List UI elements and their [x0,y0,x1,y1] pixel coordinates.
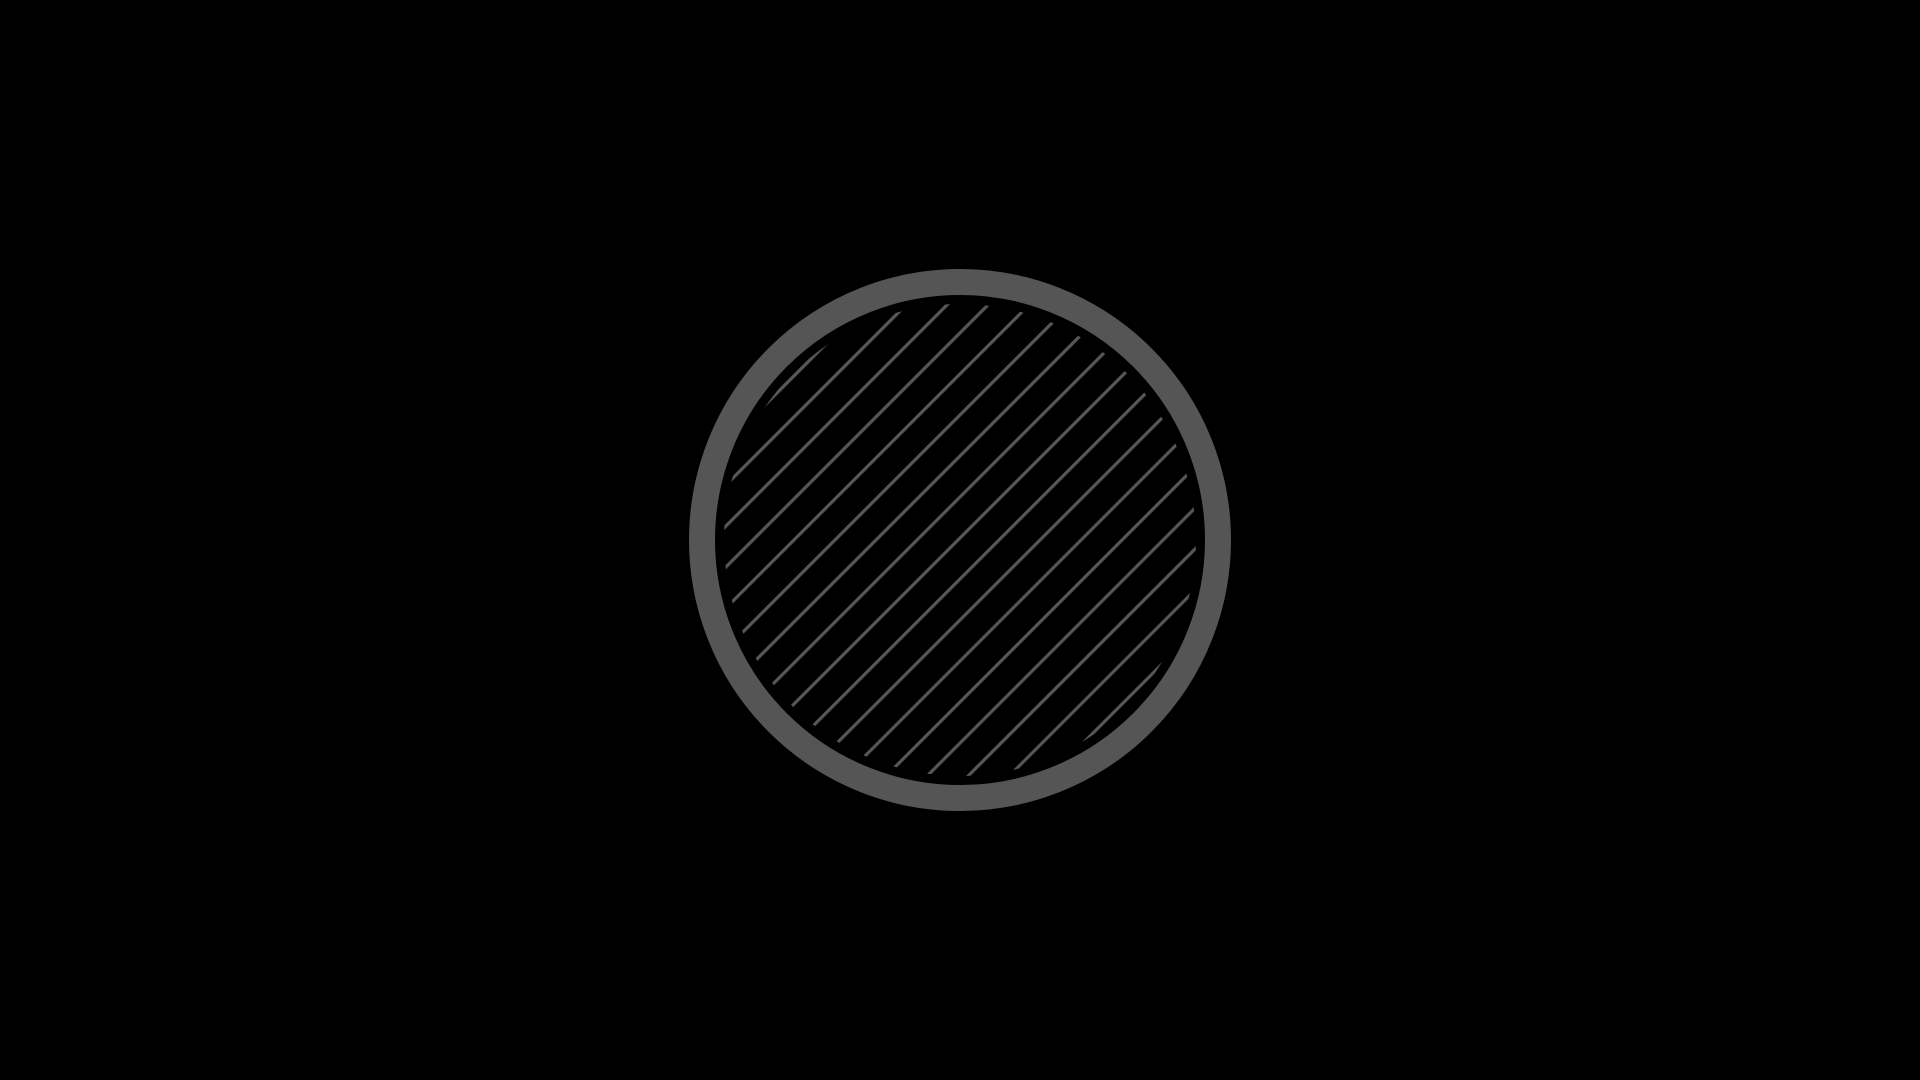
hatched circle graphic [689,269,1231,811]
hatch fill [724,304,1196,776]
outer ring [702,282,1218,798]
